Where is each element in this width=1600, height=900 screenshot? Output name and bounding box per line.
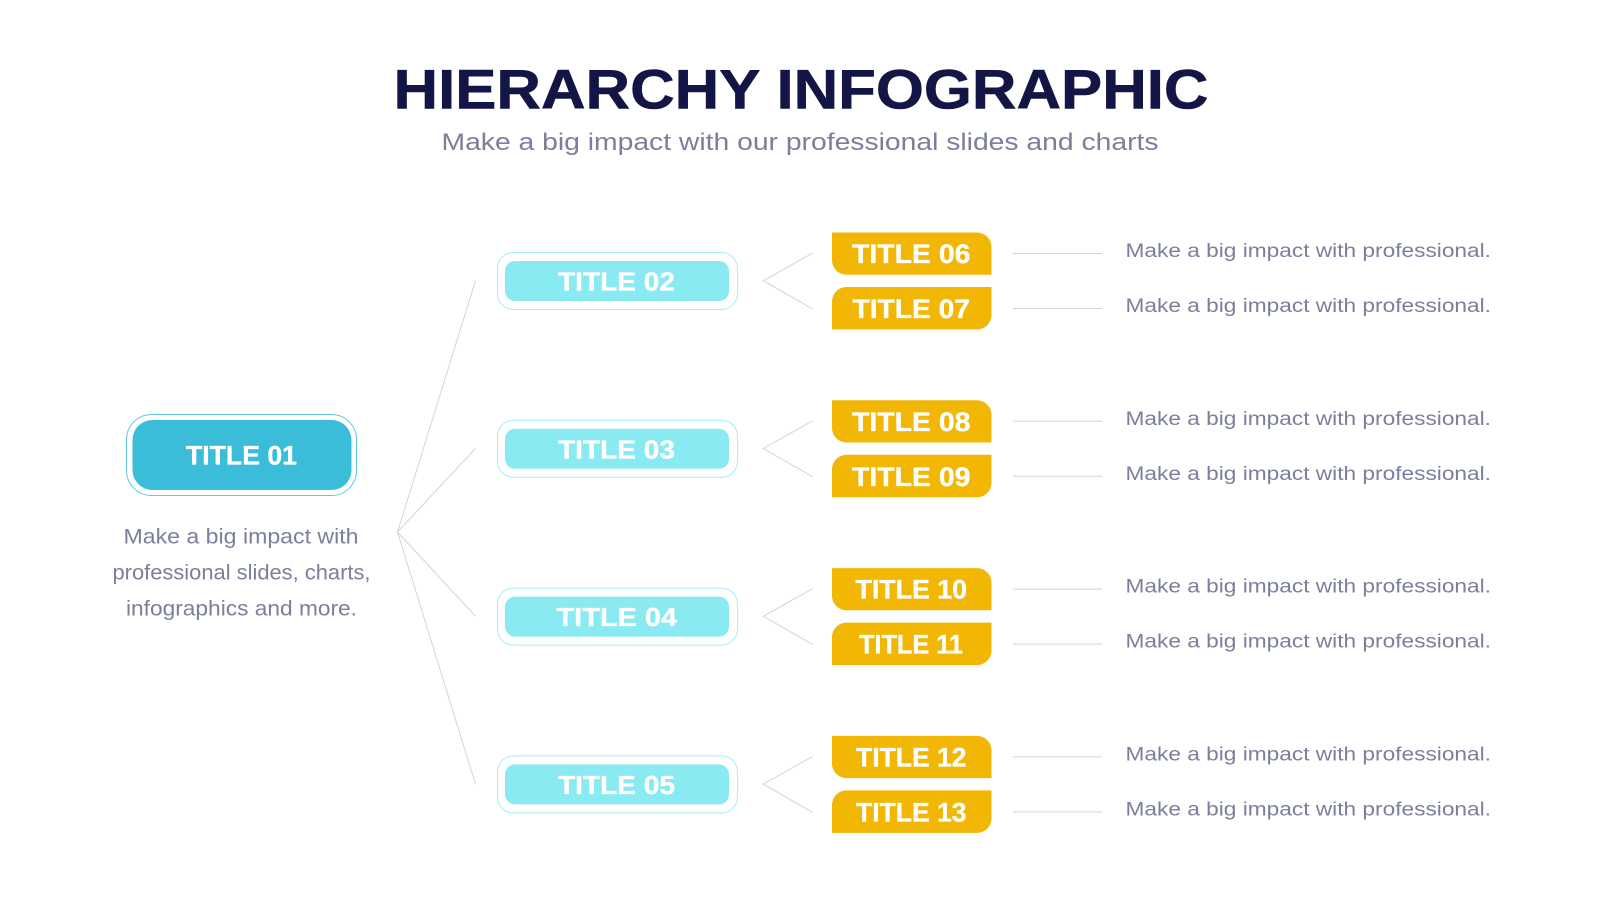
- title 07 tag: TITLE 07: [852, 294, 970, 324]
- title 06 tag: [832, 232, 992, 275]
- panel: title 01 root node: TITLE 01: [186, 440, 297, 470]
- leader line 11: [1013, 643, 1102, 645]
- title 03 node: TITLE 03: [558, 434, 675, 464]
- text block: root description: infographics and more.: [126, 598, 357, 620]
- title: HIERARCHY INFOGRAPHIC: [394, 58, 1208, 120]
- title 02 node: TITLE 02: [558, 266, 675, 296]
- leader line 09: [1013, 475, 1102, 477]
- title 07 tag: [832, 287, 992, 330]
- panel: branch 03: [498, 400, 1491, 497]
- leader line 08: [1013, 420, 1102, 422]
- description 09: Make a big impact with professional.: [1126, 464, 1491, 485]
- description 12: Make a big impact with professional.: [1126, 744, 1491, 765]
- chevron connector 03: [763, 421, 813, 477]
- title 06 tag: TITLE 06: [852, 239, 970, 269]
- description 11: Make a big impact with professional.: [1126, 632, 1491, 653]
- title 09 tag: [832, 455, 992, 497]
- text block: root description: professional slides, charts,: [112, 562, 370, 584]
- title 12 tag: [832, 736, 992, 778]
- leader line 13: [1013, 811, 1102, 813]
- chevron connector 04: [763, 589, 813, 645]
- description 07: Make a big impact with professional.: [1126, 296, 1491, 317]
- description 06: Make a big impact with professional.: [1126, 241, 1491, 262]
- title 08 tag: [832, 400, 992, 442]
- title 05 node: [498, 756, 738, 813]
- leader line 07: [1013, 308, 1102, 310]
- title 04 node: TITLE 04: [556, 602, 678, 632]
- description 08: Make a big impact with professional.: [1126, 409, 1491, 430]
- title 02 node: [498, 252, 738, 310]
- leader line 12: [1013, 756, 1102, 758]
- title 08 tag: TITLE 08: [852, 407, 970, 437]
- text block: root description: Make a big impact with: [124, 526, 358, 548]
- connector lines from root to second level: [398, 281, 476, 784]
- chevron connector 02: [763, 253, 813, 309]
- title 05 node: TITLE 05: [558, 770, 675, 800]
- description 13: Make a big impact with professional.: [1126, 799, 1491, 820]
- title 04 node: [498, 588, 738, 645]
- subtitle: Make a big impact with our professional slides and charts: [442, 129, 1158, 156]
- title 11 tag: TITLE 11: [859, 630, 963, 660]
- panel: title 01 root node: [126, 414, 356, 496]
- title 12 tag: TITLE 12: [856, 742, 966, 772]
- leader line 06: [1013, 252, 1102, 254]
- title 13 tag: [832, 790, 992, 833]
- title 10 tag: [832, 568, 992, 610]
- chevron connector 05: [763, 756, 813, 812]
- panel: branch 04: [498, 568, 1491, 665]
- title 10 tag: TITLE 10: [856, 575, 967, 605]
- title 11 tag: [832, 623, 992, 665]
- title 03 node: [498, 420, 738, 477]
- leader line 10: [1013, 588, 1102, 590]
- text block: root description: [112, 526, 370, 620]
- title 13 tag: TITLE 13: [856, 797, 966, 827]
- title 09 tag: TITLE 09: [852, 462, 970, 492]
- panel: branch 02: [498, 232, 1491, 330]
- description 10: Make a big impact with professional.: [1126, 577, 1491, 598]
- panel: branch 05: [498, 736, 1491, 833]
